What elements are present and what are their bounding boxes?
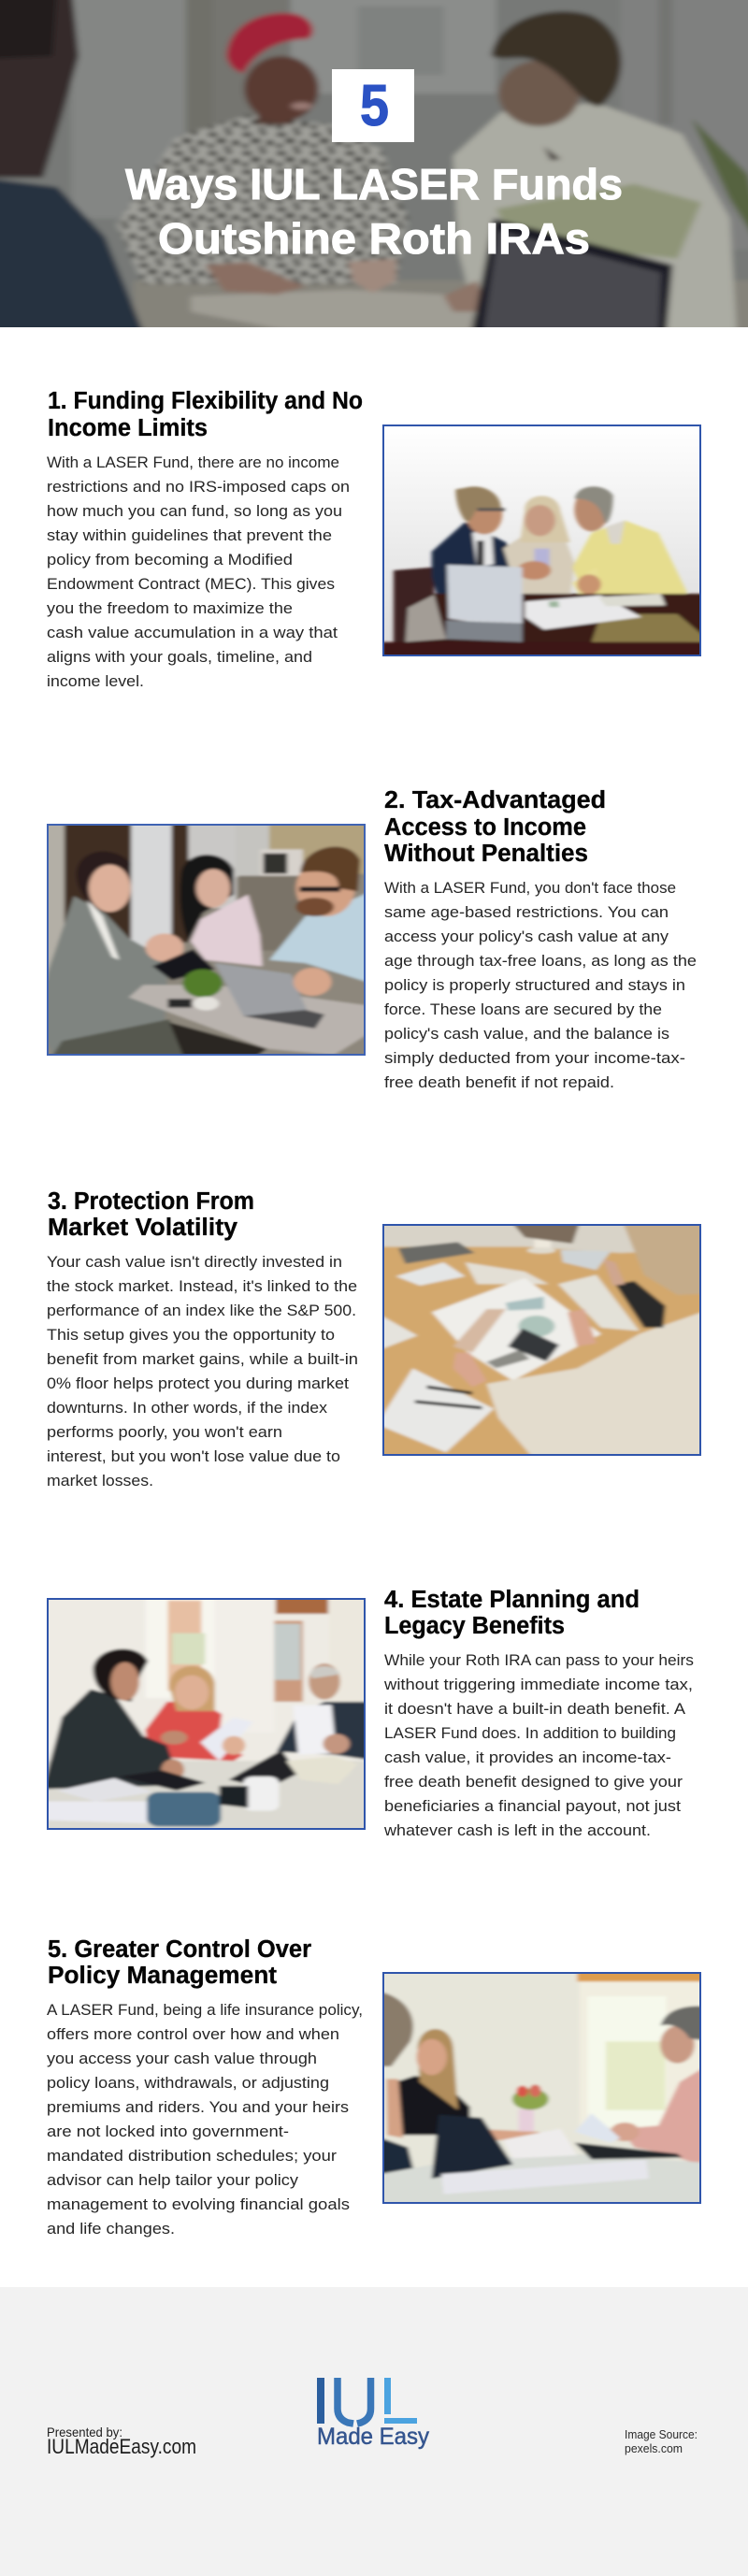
chair [394,568,434,655]
vase and flowers [519,2109,534,2131]
body text 2: simply deducted from your income-tax- [384,1050,685,1067]
body text 4: While your Roth IRA can pass to your heirs [384,1652,694,1669]
presented by: IULMadeEasy.com [47,2435,196,2458]
body text 1: income level. [47,673,144,690]
woman center [396,2076,470,2135]
panel: section 5 greater control [47,1936,711,2238]
heading 5: 5. Greater Control Over [48,1936,311,1963]
heading 2: 2. Tax-Advantaged [384,787,606,813]
photo: meeting in bright office [372,1964,711,2213]
body text 2: policy is properly structured and stays in [384,977,685,994]
body text 4: without triggering immediate income tax, [383,1677,693,1693]
photo: desk with charts and calculator [382,1224,701,1456]
body text 2: same age-based restrictions. You can [384,904,669,921]
man head [498,61,580,126]
laptop [470,218,672,343]
woman in cream blouse [484,1311,699,1454]
body text 3: interest, but you won't lose value due to [47,1448,340,1465]
body text 5: are not locked into government- [47,2123,289,2140]
body text 2 [384,880,697,1091]
heading 5: Policy Management [48,1963,278,1989]
body text 3: performs poorly, you won't earn [47,1424,282,1441]
body text 3: This setup gives you the opportunity to [47,1327,335,1344]
title: Outshine Roth IRAs [158,214,590,263]
heading 2: Without Penalties [384,841,588,867]
body text 5 [47,2002,363,2238]
woman head [254,112,288,127]
body text 4 [383,1652,694,1839]
heading 3: 3. Protection From [48,1188,254,1215]
man left suit [432,522,529,601]
heading 4: 4. Estate Planning and [384,1587,640,1613]
body text 1: how much you can fund, so long as you [47,503,342,520]
body text 3: performance of an index like the S&P 500. [47,1302,356,1319]
body text 3: downturns. In other words, if the index [47,1400,328,1417]
footer [0,2287,748,2576]
table [410,594,711,645]
photo: three people at a table with laptop [381,425,711,661]
man shirt [453,103,737,339]
body text 4: LASER Fund does. In addition to building [384,1725,676,1742]
logo: IUL Made Easy: Made Easy [317,2424,429,2450]
panel: section 1 funding flexibility [47,388,711,690]
man left [372,1990,413,2066]
body text 1: you the freedom to maximize the [47,600,293,617]
body text 3: the stock market. Instead, it's linked to the [47,1278,357,1295]
hero banner [0,0,748,343]
body text 5: advisor can help tailor your policy [47,2172,299,2189]
body text 4: free death benefit designed to give your [384,1774,683,1791]
body text 1: aligns with your goals, timeline, and [47,649,312,666]
heading 4 [384,1587,640,1639]
clipboard [384,1315,419,1350]
heading 1 [48,388,363,441]
notebook [152,949,215,980]
body text 1: policy from becoming a Modified [47,552,293,568]
lady hair and body [191,895,263,966]
body text 3 [47,1254,358,1489]
body text 1: cash value accumulation in a way that [47,625,338,641]
body text 1: restrictions and no IRS-imposed caps on [47,479,350,496]
papers [525,596,641,629]
woman right [620,2064,711,2169]
old man [277,1702,377,1761]
photo: couple reviewing documents with advisor [34,1590,379,1839]
phone and hands [534,549,550,568]
man left head [464,509,505,536]
presented by: Presented by: [47,2425,122,2439]
laptop [447,565,523,624]
second person arm [615,1281,666,1328]
tablet [432,2115,512,2179]
body text 2: policy's cash value, and the balance is [384,1026,669,1043]
heading 3: Market Volatility [48,1215,238,1241]
body text 2: force. These loans are secured by the [384,1001,662,1018]
heading 4: Legacy Benefits [384,1613,565,1639]
body text 1: With a LASER Fund, there are no income [47,454,339,471]
body text 5: you access your cash value through [47,2051,317,2067]
body text 5: management to evolving financial goals [47,2196,350,2213]
VR headset [243,1777,279,1811]
body text 2: age through tax-free loans, as long as the [384,953,697,970]
body text 1: Endowment Contract (MEC). This gives [47,576,335,593]
photo: advisor with couple and laptop [47,824,366,1056]
body text 1 [47,454,350,690]
image source [625,2427,698,2455]
presented by [47,2425,196,2458]
body text 3: 0% floor helps protect you during market [47,1375,349,1392]
table [129,985,377,1055]
number badge [332,69,414,142]
body text 4: cash value, it provides an income-tax- [384,1749,671,1766]
title: Ways IUL LASER Funds [125,160,623,209]
table [133,281,748,327]
heading 2 [384,787,606,867]
heading 1: 1. Funding Flexibility and No [48,388,363,414]
body text 2: free death benefit if not repaid. [384,1074,614,1091]
body text 3: market losses. [47,1473,153,1489]
body text 4: whatever cash is left in the account. [383,1822,651,1839]
man right sweater [572,521,687,601]
plant [182,970,223,998]
body text 2: With a LASER Fund, you don't face those [384,880,676,897]
table [34,1761,379,1839]
big chart paper [432,1278,601,1381]
logo: IUL Made Easy [317,2378,429,2450]
title [125,160,623,263]
hero photo [0,0,748,343]
body text 3: benefit from market gains, while a built-in [47,1351,358,1368]
body text 4: beneficiaries a financial payout, not just [384,1798,681,1815]
woman top [117,115,408,283]
number badge: 5 [360,74,389,138]
body text 2: access your policy's cash value at any [384,928,669,945]
body text 5: premiums and riders. You and your heirs [47,2099,349,2116]
woman [146,1702,243,1761]
panel: section 2 tax-advantaged access [34,787,697,1091]
heading 2: Access to Income [384,814,586,841]
woman [503,533,575,601]
body text 1: stay within guidelines that prevent the [47,527,332,544]
notebook and tablet [57,1778,152,1802]
body text 5: policy loans, withdrawals, or adjusting [47,2075,329,2092]
heading 1: Income Limits [48,415,208,441]
image source: Image Source: [625,2427,698,2441]
image source: pexels.com [625,2441,683,2455]
heading 5 [48,1936,311,1989]
body text 5: and life changes. [47,2221,175,2238]
panel: section 3 protection from market volatility [47,1188,711,1489]
body text 5: A LASER Fund, being a life insurance policy, [47,2002,363,2019]
body text 4: it doesn't have a built-in death benefit. A [384,1701,685,1718]
left person [0,0,79,178]
calculator [508,1329,559,1361]
heading 3 [48,1188,254,1241]
body text 3: Your cash value isn't directly invested in [47,1254,342,1271]
woman left suit [49,896,168,1052]
body text 5: mandated distribution schedules; your [47,2148,338,2165]
papers [503,2129,577,2158]
panel: section 4 estate planning [34,1587,694,1839]
man left suit [43,1690,177,1789]
lower paper [377,1368,494,1452]
man right [267,892,364,983]
hands [205,262,306,295]
laptop [214,963,307,1016]
body text 5: offers more control over how and when [47,2026,339,2043]
plant [496,184,701,259]
table [372,2153,711,2213]
